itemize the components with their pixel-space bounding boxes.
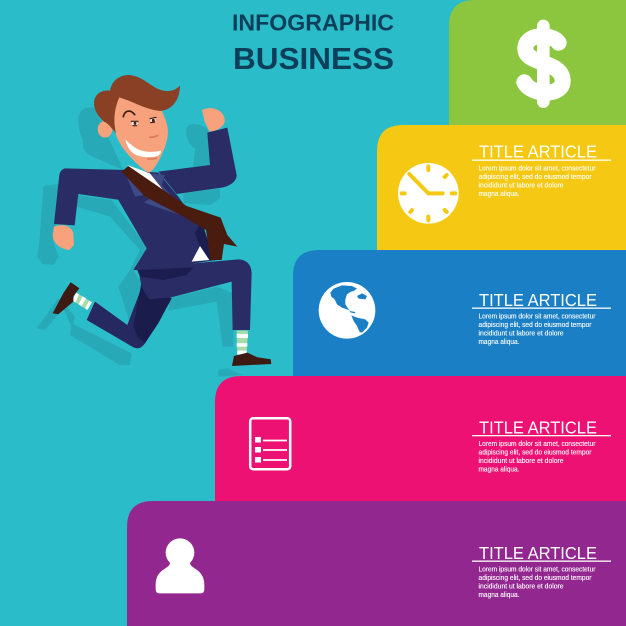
text: blue article body: adipiscing elit, sed do eiusmod tempor: [478, 320, 592, 329]
back leg: [87, 282, 172, 348]
text: blue article body: magna aliqua.: [478, 337, 520, 346]
text: yellow article body: Lorem ipsum dolor sit amet, consectetur: [478, 164, 596, 172]
title: [232, 10, 394, 76]
suit jacket: [118, 170, 217, 271]
text: blue article body: Lorem ipsum dolor sit amet, consectetur: [478, 312, 596, 320]
tie strap and tie: [122, 166, 237, 260]
raised arm and fist: [158, 108, 237, 194]
text: purple article body: Lorem ipsum dolor sit amet, consectetur: [478, 564, 596, 574]
smile: [125, 139, 161, 157]
text: blue article body: [478, 312, 596, 346]
hair: [94, 75, 180, 133]
icon: dollar sign: [524, 26, 563, 102]
title: yellow article: TITLE ARTICLE: [479, 142, 597, 162]
icon: clock: [398, 163, 459, 224]
panel: yellow step: [377, 125, 626, 250]
text: pink article body: magna aliqua.: [478, 464, 520, 474]
panel: purple step: [127, 501, 626, 626]
back arm and fist: [53, 168, 127, 250]
text: pink article body: [478, 439, 596, 474]
text: yellow article body: incididunt ut labore et dolore: [478, 180, 564, 190]
text: purple article body: [478, 564, 596, 599]
back foot with sock: [53, 282, 92, 314]
panel: green step: [449, 0, 626, 125]
text: pink article body: adipiscing elit, sed do eiusmod tempor: [478, 448, 592, 456]
text: pink article body: incididunt ut labore et dolore: [478, 456, 564, 465]
title: pink article: TITLE ARTICLE: [479, 418, 597, 438]
text: purple article body: magna aliqua.: [478, 590, 520, 599]
title: purple article: TITLE ARTICLE: [479, 543, 597, 563]
panel: pink step: [215, 376, 626, 501]
businessman running: [37, 75, 271, 377]
title: blue article: TITLE ARTICLE: [479, 290, 597, 310]
head: [94, 75, 180, 173]
panel: blue step: [293, 250, 626, 376]
front leg: [139, 259, 252, 330]
icon: globe: [319, 282, 375, 339]
shirt and lapels: [127, 165, 209, 262]
icon: person: [156, 538, 204, 593]
title: INFOGRAPHIC: [232, 10, 394, 36]
title: BUSINESS: [233, 41, 394, 76]
text: yellow article body: adipiscing elit, sed do eiusmod tempor: [478, 172, 592, 181]
icon: document list: [250, 418, 290, 469]
eyes and brow: [123, 111, 135, 117]
front foot with sock: [232, 331, 271, 366]
text: yellow article body: magna aliqua.: [478, 189, 520, 198]
text: yellow article body: [478, 164, 596, 198]
text: purple article body: incididunt ut labore et dolore: [478, 582, 564, 590]
text: purple article body: adipiscing elit, sed do eiusmod tempor: [478, 573, 592, 582]
text: pink article body: Lorem ipsum dolor sit amet, consectetur: [478, 439, 596, 448]
character shadow: [37, 107, 243, 377]
text: blue article body: incididunt ut labore et dolore: [478, 328, 564, 338]
